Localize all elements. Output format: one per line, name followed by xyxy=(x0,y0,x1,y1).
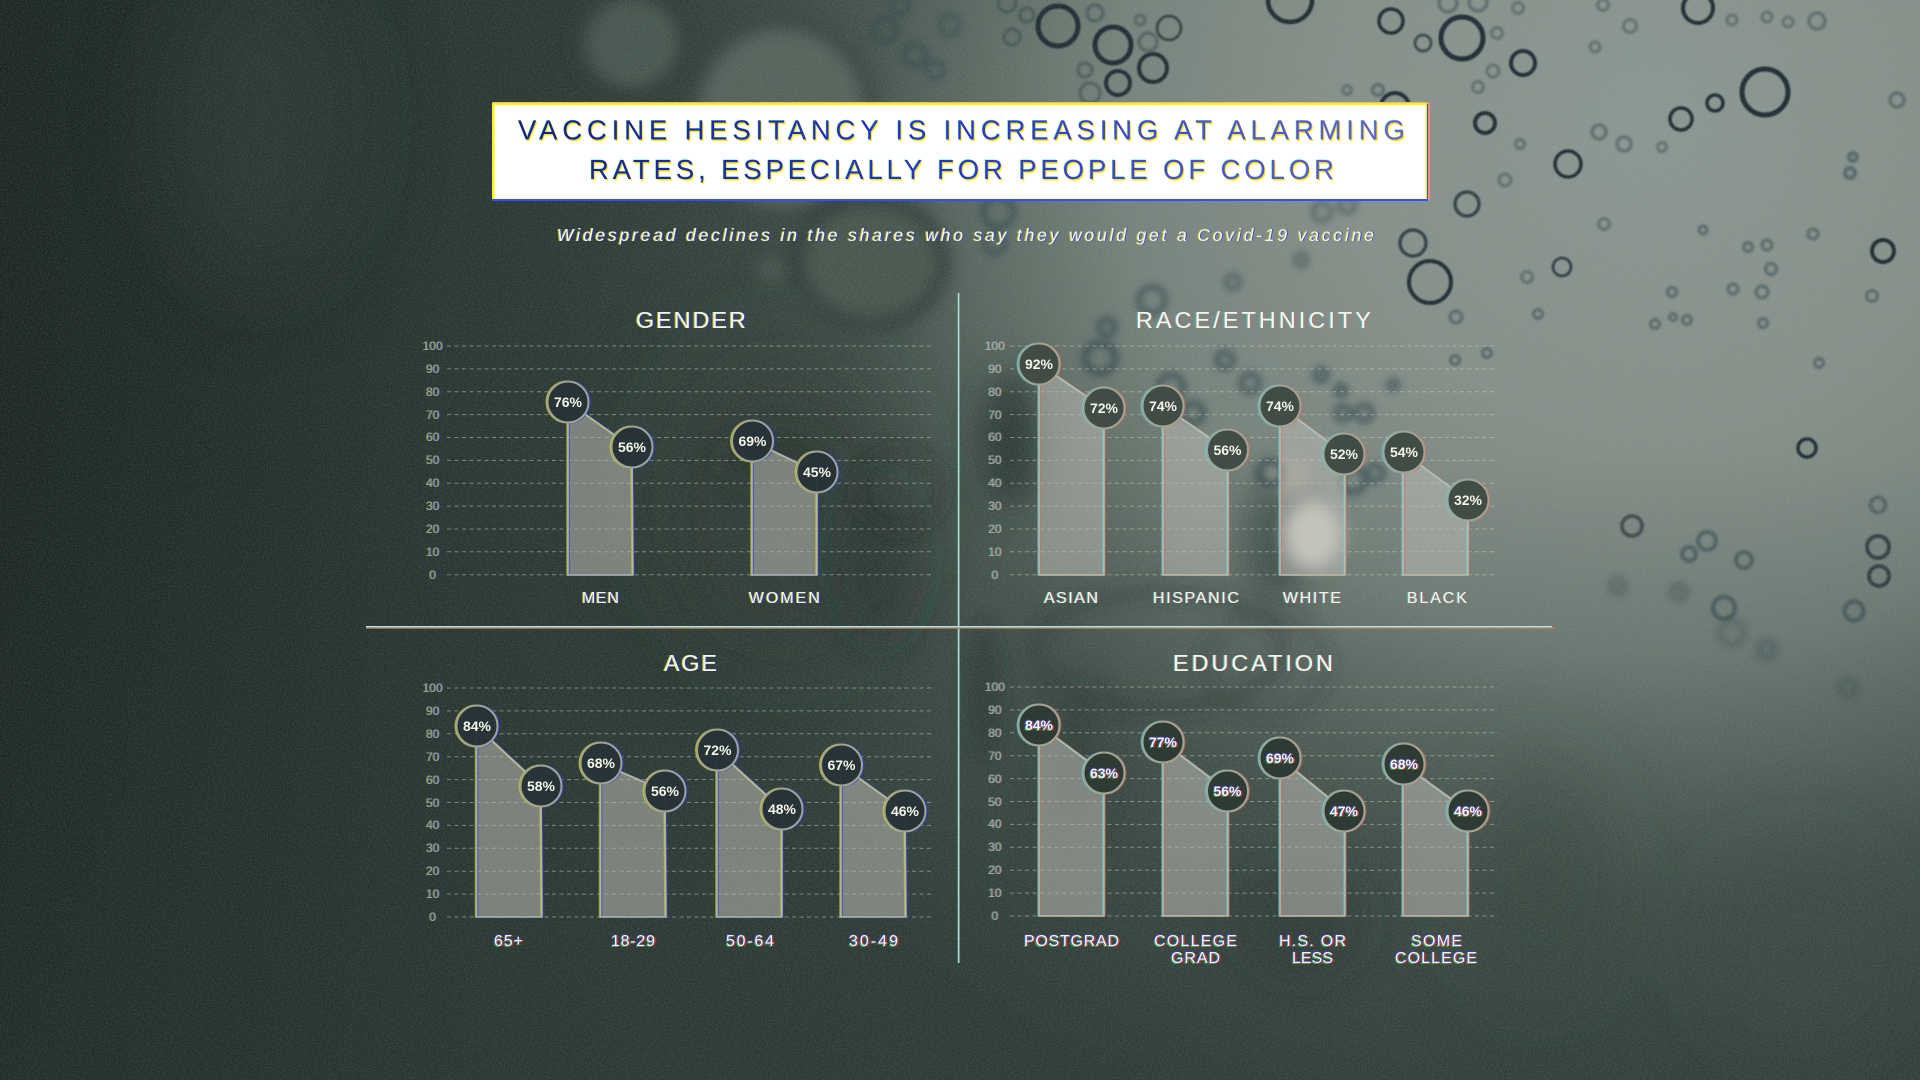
bar: some college: 68% xyxy=(1390,756,1419,772)
y axis: age: 10 xyxy=(426,887,440,901)
divider: horizontal xyxy=(366,627,1555,628)
y axis: education: 0 xyxy=(992,909,999,923)
y axis: gender: 10 xyxy=(426,545,440,559)
y axis: gender: 80 xyxy=(426,385,440,399)
y axis: race/ethnicity xyxy=(985,339,1005,582)
y axis: education: 100 xyxy=(985,680,1005,694)
bar: 30-49 xyxy=(821,744,926,950)
bar: asian: 72% xyxy=(1090,400,1119,416)
bar: black: 32% xyxy=(1454,492,1483,508)
bar: 65+ xyxy=(456,706,562,950)
bar: 50-64: 48% xyxy=(768,801,797,817)
bar: college grad: 77% xyxy=(1149,734,1178,750)
y axis: education xyxy=(985,680,1005,923)
y axis: education: 20 xyxy=(988,863,1002,877)
y axis: gender: 30 xyxy=(426,499,440,513)
bar: college grad xyxy=(1142,722,1248,967)
bar: 65+: 84% xyxy=(463,718,492,734)
bar: college grad: 56% xyxy=(1213,783,1242,799)
bar: asian: ASIAN xyxy=(1044,590,1098,607)
panel: age xyxy=(423,650,934,950)
panel: education xyxy=(985,650,1498,967)
bar: h.s. or less: 69% xyxy=(1266,750,1295,766)
bar: h.s. or less: 47% xyxy=(1330,803,1359,819)
bar: some college xyxy=(1384,744,1488,967)
y axis: race/ethnicity: 70 xyxy=(988,408,1002,422)
bar: hispanic: 56% xyxy=(1213,442,1242,458)
bar: 30-49: 30-49 xyxy=(849,933,898,950)
title box: VACCINE HESITANCY IS INCREASING AT ALARMING xyxy=(518,114,1405,146)
bar: 18-29: 68% xyxy=(587,755,616,771)
heading: education: EDUCATION xyxy=(1173,650,1333,676)
bar: black: 54% xyxy=(1390,444,1419,460)
y axis: race/ethnicity: 80 xyxy=(988,385,1002,399)
bar: college grad: GRAD xyxy=(1171,950,1220,967)
bar: postgrad: 63% xyxy=(1090,765,1119,781)
y axis: age: 70 xyxy=(426,750,440,764)
bar: postgrad: POSTGRAD xyxy=(1024,933,1119,950)
bar: some college: COLLEGE xyxy=(1395,950,1477,967)
bar: hispanic xyxy=(1142,386,1248,607)
bar: hispanic: 74% xyxy=(1149,398,1178,414)
bar: 65+: 58% xyxy=(527,778,556,794)
y axis: age: 40 xyxy=(426,818,440,832)
bar: women: WOMEN xyxy=(749,590,820,607)
y axis: education: 10 xyxy=(988,886,1002,900)
y axis: race/ethnicity: 100 xyxy=(985,339,1005,353)
y axis: age: 0 xyxy=(430,910,437,924)
bar: men xyxy=(548,382,652,607)
bar: white: 74% xyxy=(1266,398,1295,414)
panel: race/ethnicity xyxy=(985,307,1498,607)
bar: black: BLACK xyxy=(1407,590,1467,607)
y axis: age: 50 xyxy=(426,796,440,810)
y axis: education: 30 xyxy=(988,840,1002,854)
panel: gender xyxy=(423,307,934,607)
bar: 50-64 xyxy=(697,730,802,950)
bar: women xyxy=(732,420,838,607)
y axis: gender: 70 xyxy=(426,408,440,422)
heading: race/ethnicity: RACE/ETHNICITY xyxy=(1136,307,1371,333)
bar: postgrad xyxy=(1018,704,1124,950)
y axis: race/ethnicity: 30 xyxy=(988,499,1002,513)
y axis: gender: 60 xyxy=(426,430,440,444)
bar: 30-49: 67% xyxy=(827,757,856,773)
y axis: education: 60 xyxy=(988,772,1002,786)
y axis: gender: 100 xyxy=(423,339,443,353)
bar: 50-64: 50-64 xyxy=(726,933,774,950)
y axis: age: 20 xyxy=(426,864,440,878)
y axis: age: 60 xyxy=(426,773,440,787)
subtitle: Widespread declines in the shares who say they would get a Covid-19 vaccine xyxy=(557,225,1374,245)
heading: gender: GENDER xyxy=(636,307,746,333)
bar: white: WHITE xyxy=(1283,590,1341,607)
bar: 30-49: 46% xyxy=(891,803,920,819)
bar: men: 56% xyxy=(618,439,647,455)
bar: h.s. or less: LESS xyxy=(1292,950,1333,967)
y axis: gender: 20 xyxy=(426,522,440,536)
bar: women: 45% xyxy=(803,464,832,480)
bar: postgrad: 84% xyxy=(1025,717,1054,733)
y axis: education: 80 xyxy=(988,726,1002,740)
title box: RATES, ESPECIALLY FOR PEOPLE OF COLOR xyxy=(589,154,1334,185)
y axis: age: 100 xyxy=(423,681,443,695)
bar: 50-64: 72% xyxy=(703,742,732,758)
y axis: age xyxy=(423,681,443,924)
bar: women: 69% xyxy=(738,433,767,449)
bar: some college: 46% xyxy=(1454,803,1483,819)
y axis: education: 40 xyxy=(988,817,1002,831)
y axis: education: 90 xyxy=(988,703,1002,717)
y axis: gender: 90 xyxy=(426,362,440,376)
bar: 18-29: 56% xyxy=(651,783,680,799)
y axis: gender xyxy=(423,339,443,582)
bar: some college: SOME xyxy=(1411,933,1462,950)
bar: asian xyxy=(1018,344,1124,607)
y axis: race/ethnicity: 10 xyxy=(988,545,1002,559)
bar: black xyxy=(1384,432,1488,607)
bar: men: MEN xyxy=(582,590,619,607)
divider: vertical xyxy=(958,293,960,963)
bar: 65+: 65+ xyxy=(494,933,523,950)
y axis: education: 70 xyxy=(988,749,1002,763)
heading: age: AGE xyxy=(664,650,717,676)
bar: white xyxy=(1260,386,1364,607)
y axis: race/ethnicity: 50 xyxy=(988,453,1002,467)
y axis: education: 50 xyxy=(988,795,1002,809)
title box xyxy=(492,102,1430,201)
bar: 18-29 xyxy=(580,742,686,950)
y axis: gender: 50 xyxy=(426,453,440,467)
y axis: age: 30 xyxy=(426,841,440,855)
bar: 18-29: 18-29 xyxy=(611,933,655,950)
bar: h.s. or less xyxy=(1260,738,1364,967)
y axis: age: 80 xyxy=(426,727,440,741)
bar: asian: 92% xyxy=(1025,356,1054,372)
y axis: race/ethnicity: 0 xyxy=(992,568,999,582)
bar: h.s. or less: H.S. OR xyxy=(1279,933,1346,950)
bar: hispanic: HISPANIC xyxy=(1153,590,1239,607)
y axis: race/ethnicity: 60 xyxy=(988,430,1002,444)
y axis: race/ethnicity: 90 xyxy=(988,362,1002,376)
bar: white: 52% xyxy=(1330,446,1359,462)
y axis: race/ethnicity: 40 xyxy=(988,476,1002,490)
bar: men: 76% xyxy=(554,394,583,410)
y axis: gender: 0 xyxy=(430,568,437,582)
y axis: gender: 40 xyxy=(426,476,440,490)
y axis: race/ethnicity: 20 xyxy=(988,522,1002,536)
bar: college grad: COLLEGE xyxy=(1154,933,1237,950)
y axis: age: 90 xyxy=(426,704,440,718)
